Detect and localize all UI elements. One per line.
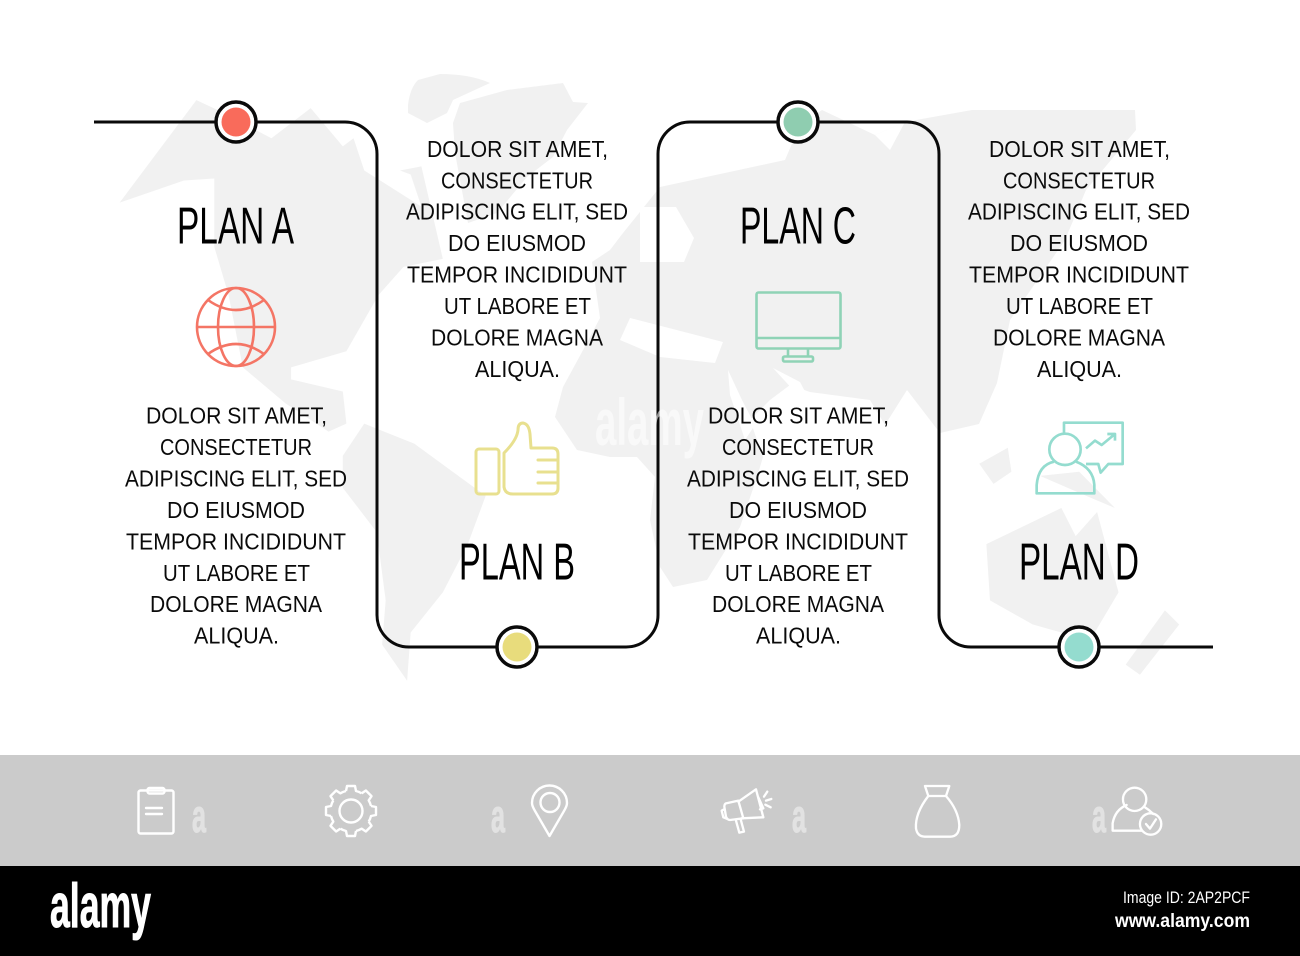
icon: gear bbox=[326, 786, 376, 836]
text block: plan B: UT LABORE ET bbox=[444, 293, 591, 319]
text block: plan D: UT LABORE ET bbox=[1006, 293, 1153, 319]
connecting timeline line bbox=[94, 122, 1213, 647]
text block: plan D: CONSECTETUR bbox=[1003, 167, 1155, 193]
icon: megaphone bbox=[722, 789, 771, 833]
text block: plan C: DOLORE MAGNA bbox=[712, 591, 884, 617]
text block: plan A bbox=[125, 402, 347, 649]
heading: plan C: PLAN C bbox=[740, 198, 856, 256]
text block: plan C: ALIQUA. bbox=[756, 623, 841, 649]
footer image id: Image ID: 2AP2PCF bbox=[1123, 888, 1250, 907]
text block: plan D: DOLOR SIT AMET, bbox=[989, 136, 1170, 162]
text block: plan D: DO EIUSMOD bbox=[1010, 230, 1148, 256]
text block: plan A: DOLORE MAGNA bbox=[150, 591, 322, 617]
icon: clipboard bbox=[138, 788, 174, 834]
icon: user with check bbox=[1113, 788, 1161, 835]
icon: monitor bbox=[756, 292, 840, 362]
text block: plan B bbox=[406, 136, 628, 382]
node: plan D bbox=[1059, 627, 1099, 667]
text block: plan B: DOLOR SIT AMET, bbox=[427, 136, 608, 162]
icon: map pin bbox=[532, 786, 567, 836]
text block: plan B: TEMPOR INCIDIDUNT bbox=[407, 262, 627, 288]
icon: presenter with chart bbox=[1037, 423, 1123, 493]
text block: plan A: UT LABORE ET bbox=[163, 560, 310, 586]
watermark letters in band bbox=[192, 790, 1106, 842]
text block: plan A: DO EIUSMOD bbox=[167, 497, 305, 523]
text block: plan B: ADIPISCING ELIT, SED bbox=[406, 199, 628, 225]
watermark letters in band: a bbox=[192, 790, 206, 842]
node: plan C bbox=[778, 102, 818, 142]
background world map bbox=[120, 74, 1179, 681]
text block: plan A: TEMPOR INCIDIDUNT bbox=[126, 528, 346, 554]
text block: plan D: DOLORE MAGNA bbox=[993, 324, 1165, 350]
text block: plan B: DO EIUSMOD bbox=[448, 230, 586, 256]
icon: globe bbox=[197, 288, 275, 366]
heading: plan A: PLAN A bbox=[177, 198, 294, 256]
watermark: alamy centre: alamy bbox=[595, 385, 704, 459]
text block: plan C: DOLOR SIT AMET, bbox=[708, 402, 889, 428]
heading: plan D: PLAN D bbox=[1019, 534, 1139, 592]
text block: plan C: TEMPOR INCIDIDUNT bbox=[688, 528, 908, 554]
footer bar bbox=[0, 866, 1300, 956]
text block: plan D bbox=[968, 136, 1190, 382]
seas cut out of the map bbox=[620, 122, 905, 440]
heading: plan B: PLAN B bbox=[459, 534, 575, 592]
text block: plan C bbox=[687, 402, 909, 649]
watermark letters in band: a bbox=[792, 790, 806, 842]
text block: plan B: DOLORE MAGNA bbox=[431, 324, 603, 350]
text block: plan D: TEMPOR INCIDIDUNT bbox=[969, 262, 1189, 288]
icon: thumbs up bbox=[476, 423, 558, 494]
node: plan A bbox=[216, 102, 256, 142]
text block: plan B: CONSECTETUR bbox=[441, 167, 593, 193]
text block: plan D: ADIPISCING ELIT, SED bbox=[968, 199, 1190, 225]
watermark letters in band: a bbox=[491, 790, 505, 842]
text block: plan C: UT LABORE ET bbox=[725, 560, 872, 586]
text block: plan B: ALIQUA. bbox=[475, 356, 560, 382]
text block: plan C: ADIPISCING ELIT, SED bbox=[687, 465, 909, 491]
watermark letters in band: a bbox=[1092, 790, 1106, 842]
text block: plan A: DOLOR SIT AMET, bbox=[146, 402, 327, 428]
bottom band bbox=[0, 755, 1300, 866]
text block: plan C: CONSECTETUR bbox=[722, 434, 874, 460]
text block: plan A: ALIQUA. bbox=[194, 623, 279, 649]
text block: plan A: ADIPISCING ELIT, SED bbox=[125, 465, 347, 491]
text block: plan C: DO EIUSMOD bbox=[729, 497, 867, 523]
footer url: www.alamy.com bbox=[1114, 911, 1250, 932]
node: plan B bbox=[497, 627, 537, 667]
footer logo: alamy bbox=[50, 872, 151, 941]
text block: plan A: CONSECTETUR bbox=[160, 434, 312, 460]
text block: plan D: ALIQUA. bbox=[1037, 356, 1122, 382]
icon: money sack bbox=[916, 786, 959, 837]
